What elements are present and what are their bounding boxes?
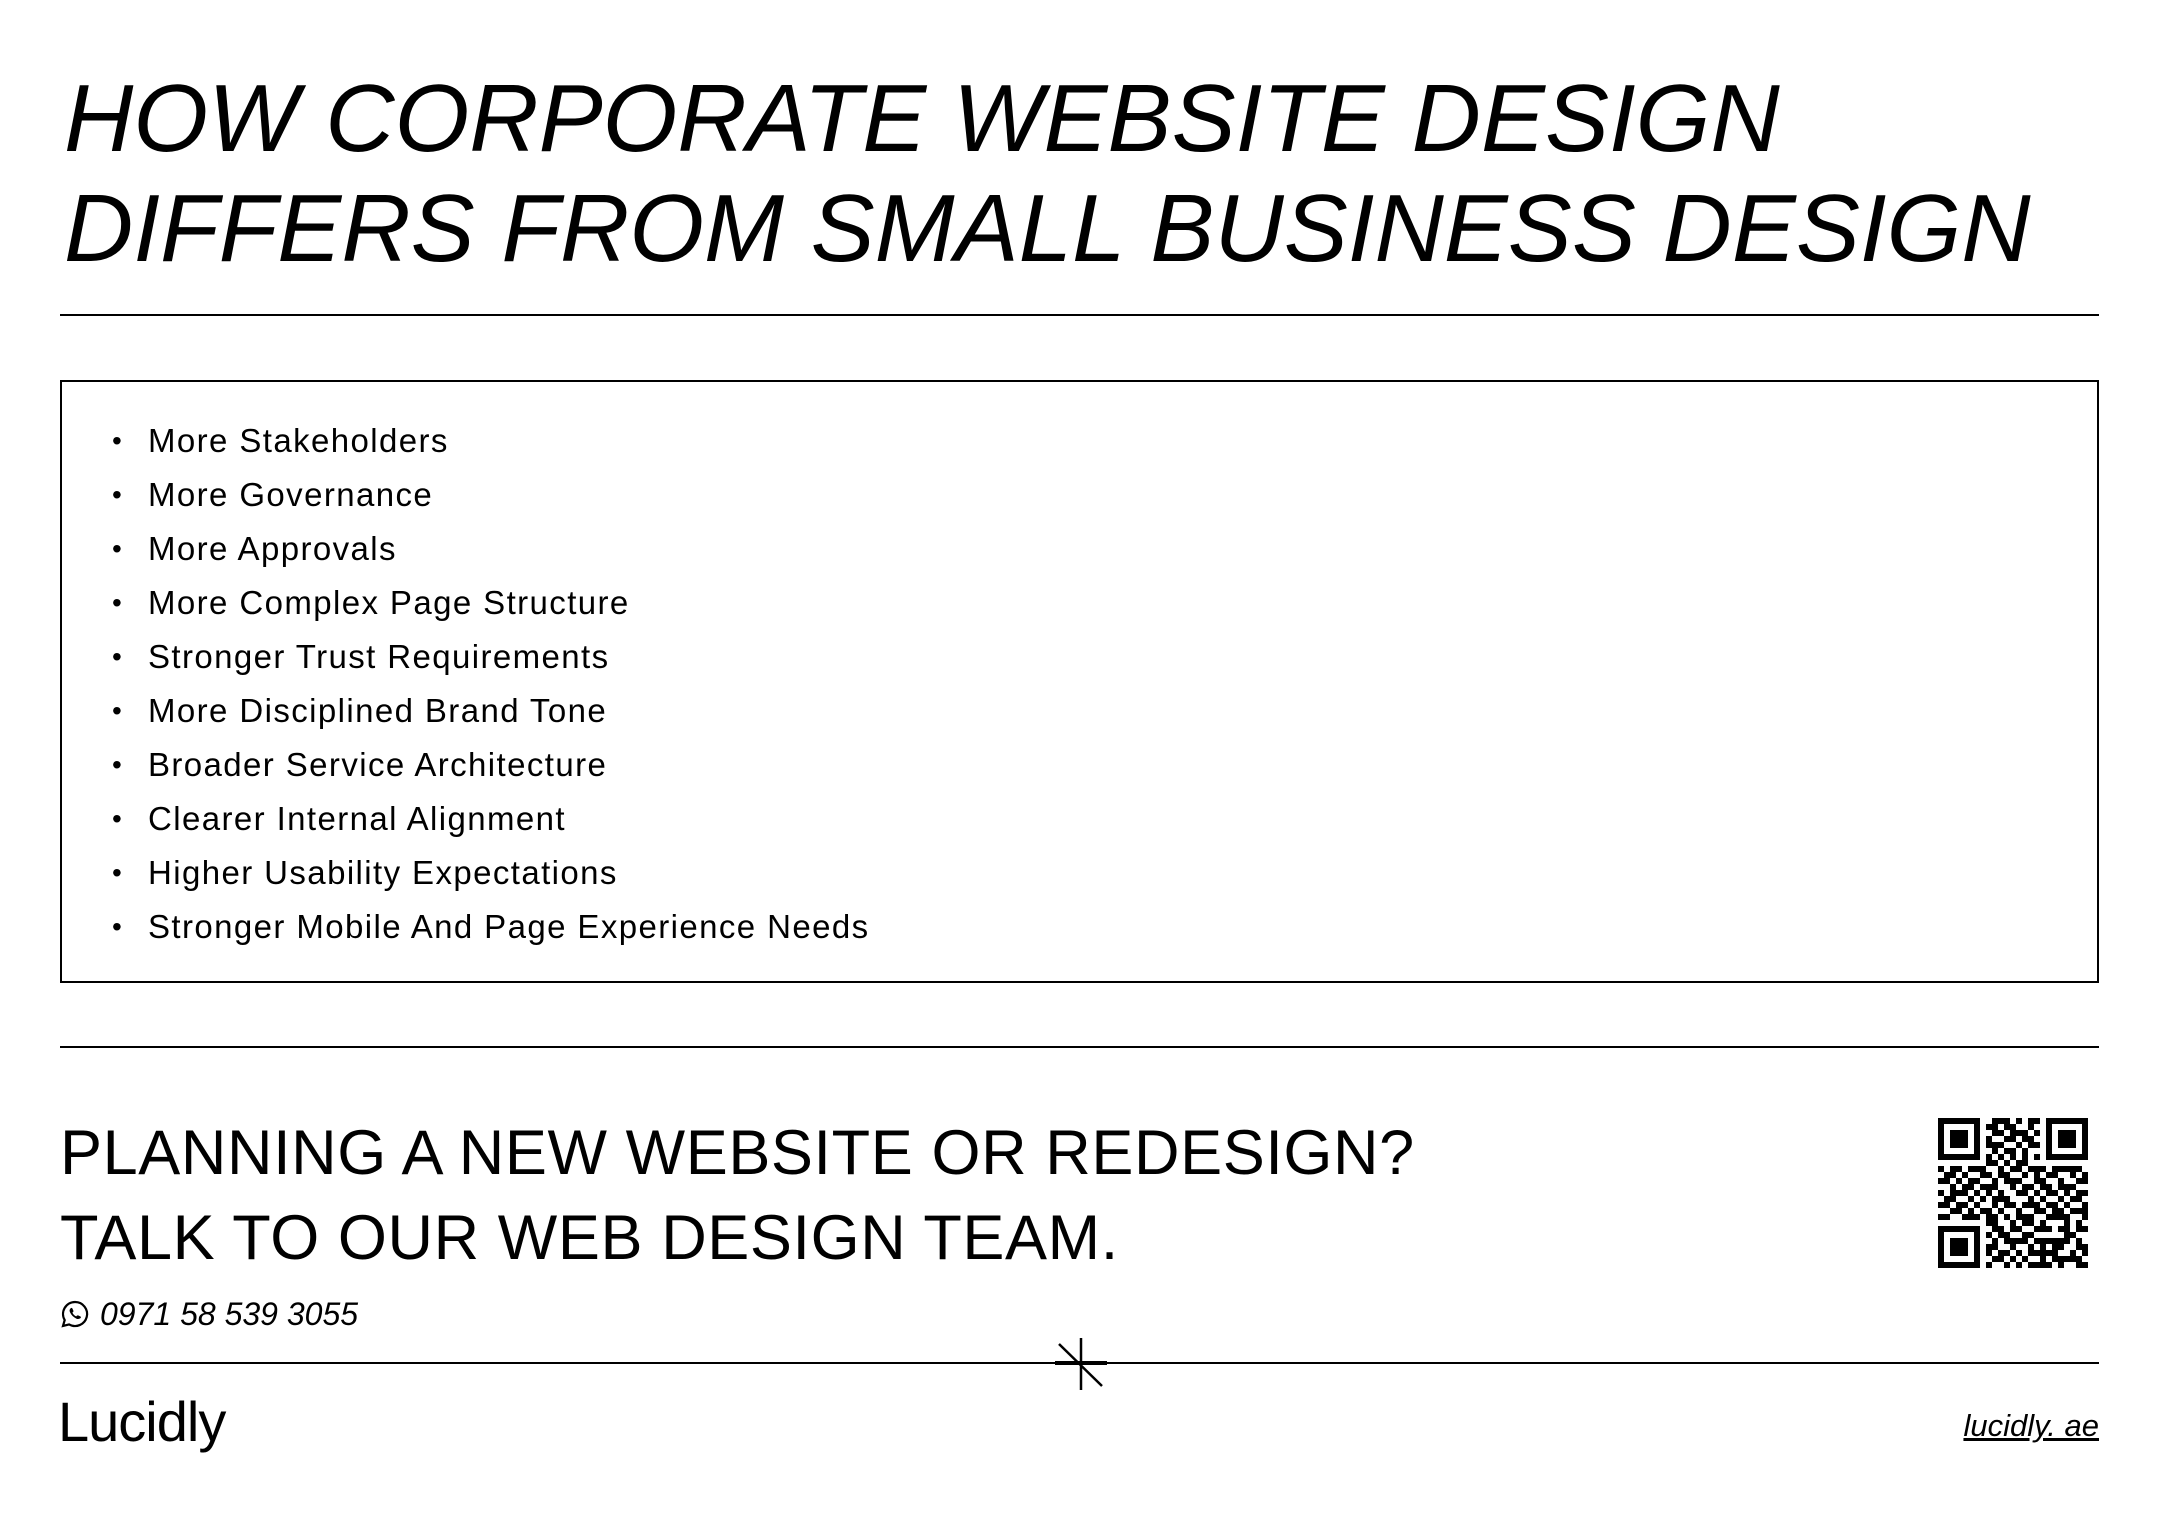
bullet list: Broader Service Architecture [148,746,607,783]
bullet list: More Governance [148,476,433,513]
title: HOW CORPORATE WEBSITE DESIGN [64,65,1780,172]
icon: star marker [1055,1338,1107,1390]
phone contact: 0971 58 539 3055 [100,1296,358,1332]
bullet list: More Complex Page Structure [148,584,630,621]
call to action heading [60,1118,1415,1273]
bullet list: More Stakeholders [148,422,449,459]
QR code [1938,1118,2088,1268]
bullet list [113,422,869,945]
call to action heading: TALK TO OUR WEB DESIGN TEAM. [60,1203,1119,1273]
panel: differences list [60,380,2099,983]
logo: Lucidly [58,1390,225,1453]
title: DIFFERS FROM SMALL BUSINESS DESIGN [64,175,2031,282]
bullet list: Higher Usability Expectations [148,854,618,891]
website link: lucidly. ae [1963,1408,2099,1443]
icon: whatsapp [61,1300,88,1328]
bullet list: Clearer Internal Alignment [148,800,566,837]
bullet list: More Approvals [148,530,397,567]
bullet list: Stronger Trust Requirements [148,638,609,675]
call to action heading: PLANNING A NEW WEBSITE OR REDESIGN? [60,1118,1415,1188]
bullet list: Stronger Mobile And Page Experience Needs [148,908,869,945]
bullet list: More Disciplined Brand Tone [148,692,607,729]
title [64,65,2031,282]
